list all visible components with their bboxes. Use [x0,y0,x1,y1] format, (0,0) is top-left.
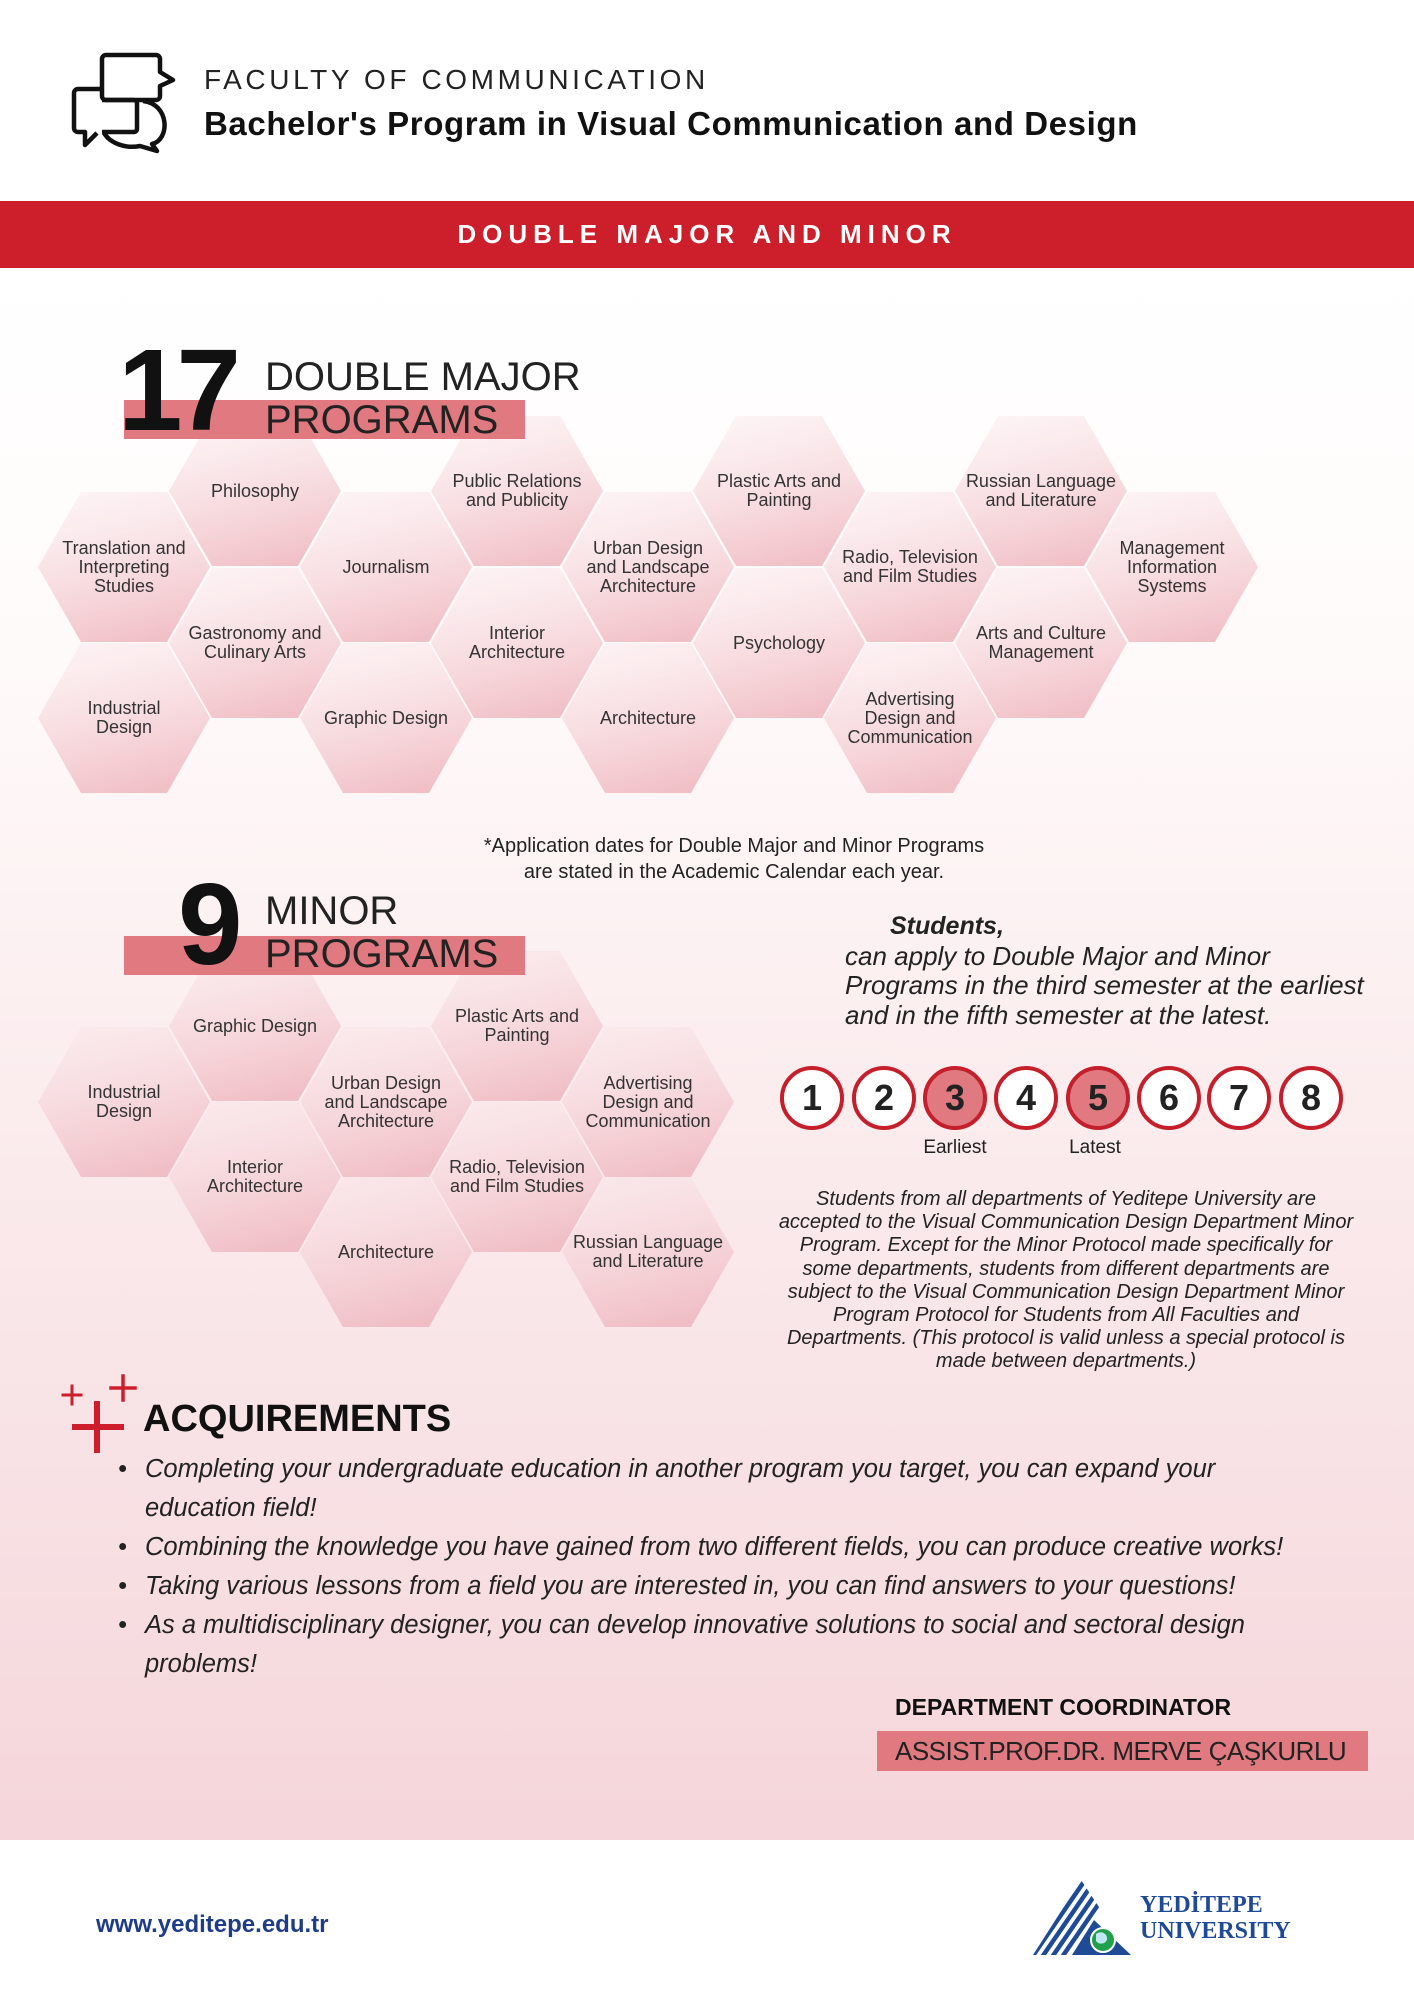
hex: Radio TV: and Film Studies [843,566,977,586]
text: education field! [145,1494,317,1522]
heading: acquirements: ACQUIREMENTS [143,1398,451,1440]
header: faculty: FACULTY OF COMMUNICATION [204,64,709,95]
hex: Psychology [693,568,865,718]
minor hex: Advertising [562,1027,734,1177]
semester circles: 7 [1229,1077,1249,1118]
hex: Industrial Design: Design [96,717,152,737]
hex: Gastronomy: Gastronomy and [188,623,322,643]
minor hex: Industrial Design: Design [96,1101,152,1121]
semester circles: Earliest [923,1137,987,1158]
hex: Plastic Arts: Painting [746,490,812,510]
minor hex: Industrial Design: Industrial [87,1082,161,1102]
text: • [118,1572,127,1600]
text: minor protocol paragraph: Program. Except for the Minor Protocol made specifically for [800,1234,1332,1256]
hex: Industrial Design [38,643,210,793]
heading: 9 minor: 9 [178,859,243,989]
text: students can apply: Programs in the third semester at the earliest [845,970,1364,1000]
hex: Advertising: Communication [847,727,973,747]
minor hex: Advertising: Communication [585,1111,711,1131]
minor hex: Russian [562,1177,734,1327]
hex: Plastic Arts: Plastic Arts and [717,471,841,491]
minor hex: Plastic Arts: Plastic Arts and [455,1006,579,1026]
text: As a multidisciplinary designer, you can develop innovative solutions to social and sectoral design [145,1611,1245,1639]
text: minor protocol paragraph: Departments. (This protocol is valid unless a special protocol is [787,1327,1345,1349]
heading: 9 minor: PROGRAMS [265,932,498,976]
semester circles: 5 [1088,1077,1108,1118]
hex: Graphic Design: Graphic Design [324,708,448,728]
minor hex: Urban: and Landscape [324,1092,448,1112]
hex: Public Relations [431,416,603,566]
text: Completing your undergraduate education in another program you target, you can expand your [145,1455,1215,1483]
hex: Russian [955,416,1127,566]
hex: Plastic Arts [693,416,865,566]
text: students can apply: can apply to Double Major and Minor [845,940,1270,970]
logo: yeditepe [1033,1881,1291,1955]
coordinator title: DEPARTMENT COORDINATOR [895,1694,1231,1720]
minor hex: Architecture [300,1177,472,1327]
hex: Interior Architecture: Architecture [469,642,565,662]
footer url: www.yeditepe.edu.tr [96,1911,328,1938]
coordinator name [877,1731,1368,1771]
hex: Arts and Culture [955,568,1127,718]
hex: Industrial Design: Industrial [87,698,161,718]
hex: Gastronomy: Culinary Arts [204,642,306,662]
hex: Public Relations: Public Relations [452,471,582,491]
semester circles: Latest [1069,1137,1121,1158]
semester circles: 1 [802,1077,822,1118]
hex: Translation: Interpreting [78,557,170,577]
minor hex: Radio TV [431,1102,603,1252]
hex: Advertising: Design and [864,708,956,728]
hex: Graphic Design [300,643,472,793]
note: application dates: are stated in the Academic Calendar each year. [524,861,944,883]
hex: Psychology: Psychology [733,633,825,653]
hex: Translation: Studies [94,576,154,596]
text: students can apply [845,912,1365,1030]
text: Combining the knowledge you have gained from two different fields, you can produce creative works! [145,1533,1283,1561]
hex: Philosophy: Philosophy [211,481,299,501]
semester circles: 8 [1301,1077,1321,1118]
coordinator name: ASSIST.PROF.DR. MERVE ÇAŞKURLU [895,1736,1346,1766]
minor hex: Urban: Architecture [338,1111,434,1131]
text: students can apply: Students, [890,912,1004,940]
minor hex: Radio TV: Radio, Television [449,1157,585,1177]
hex: Advertising: Advertising [865,689,955,709]
hex: Translation: Translation and [62,538,186,558]
hex: MIS: Management [1119,538,1225,558]
minor hex: Interior: Interior [227,1157,283,1177]
hex: Urban Design [562,492,734,642]
hex: Urban Design: Architecture [600,576,696,596]
note: application dates [484,835,984,883]
banner [0,201,1414,268]
minor hex: Urban: Urban Design [331,1073,441,1093]
text: problems! [145,1650,257,1678]
hex: Radio TV: Radio, Television [842,547,978,567]
hex: Public Relations: and Publicity [466,490,568,510]
hex: Arts and Culture: Arts and Culture [976,623,1106,643]
hex: Translation [38,492,210,642]
semester circles [780,1066,1343,1158]
hex: Journalism [300,492,472,642]
heading: 17 double major: 17 [118,325,235,455]
header: program title: Bachelor's Program in Visual Communication and Design [204,105,1138,142]
minor hex: Graphic Design: Graphic Design [193,1016,317,1036]
minor hex: Industrial Design [38,1027,210,1177]
text: minor protocol paragraph: accepted to the Visual Communication Design Department Minor [779,1211,1353,1233]
minor hex: Plastic Arts: Painting [484,1025,550,1045]
bullet list [118,1455,1283,1678]
hex: Advertising [824,643,996,793]
semester circles: 3 [945,1077,965,1118]
hex: Architecture [562,643,734,793]
hex: Journalism: Journalism [342,557,430,577]
semester circles: 4 [1016,1077,1036,1118]
hex: Russian: and Literature [985,490,1097,510]
text: minor protocol paragraph: some departments, students from different departments are [803,1258,1329,1280]
minor hex: Interior: Architecture [207,1176,303,1196]
banner: DOUBLE MAJOR AND MINOR [457,219,957,249]
hex: Interior Architecture [431,568,603,718]
text: minor protocol paragraph: Students from all departments of Yeditepe University are [816,1188,1316,1210]
hex: MIS: Information [1127,557,1217,577]
minor hex: Architecture: Architecture [338,1242,434,1262]
text: • [118,1455,127,1483]
text: • [118,1611,127,1639]
text: minor protocol paragraph: made between departments.) [936,1350,1196,1372]
semester circles: 6 [1159,1077,1179,1118]
heading: 17 double major: PROGRAMS [265,398,498,442]
hex: Gastronomy [169,568,341,718]
hex: Urban Design: Urban Design [593,538,703,558]
heading: 17 double major [118,325,581,455]
text: students can apply: and in the fifth semester at the latest. [845,1000,1271,1030]
hex: Interior Architecture: Interior [489,623,545,643]
hex: Radio TV [824,492,996,642]
note: application dates: *Application dates for Double Major and Minor Programs [484,835,984,857]
minor hex: Graphic Design [169,951,341,1101]
text: minor protocol paragraph: Program Protocol for Students from All Faculties and [833,1304,1299,1326]
minor hex: Plastic Arts [431,951,603,1101]
hex: Philosophy [169,416,341,566]
minor hex: Advertising: Advertising [603,1073,693,1093]
hex: Arts and Culture: Management [988,642,1094,662]
logo: yeditepe: UNIVERSITY [1140,1918,1291,1944]
semester circles: 2 [874,1077,894,1118]
text: • [118,1533,127,1561]
hex: Urban Design: and Landscape [586,557,710,577]
text: minor protocol paragraph [779,1188,1354,1372]
hex: MIS: Systems [1137,576,1207,596]
hex: Russian: Russian Language [966,471,1116,491]
minor hex: Radio TV: and Film Studies [450,1176,584,1196]
minor hex: Interior [169,1102,341,1252]
text: Taking various lessons from a field you are interested in, you can find answers to your questions! [145,1572,1235,1600]
heading: 17 double major: DOUBLE MAJOR [265,355,581,399]
minor hex: Russian: Russian Language [573,1232,723,1252]
heading: 9 minor: MINOR [265,889,398,933]
logo: yeditepe: YEDİTEPE [1140,1892,1263,1918]
hex: MIS [1086,492,1258,642]
text: minor protocol paragraph: subject to the Visual Communication Design Department Minor [788,1281,1344,1303]
heading: 9 minor [124,859,525,989]
hex: Architecture: Architecture [600,708,696,728]
minor hex: Advertising: Design and [602,1092,694,1112]
minor hex: Urban [300,1027,472,1177]
icon: plus signs [62,1374,137,1453]
minor hex: Russian: and Literature [592,1251,704,1271]
icon: speech bubbles [72,52,176,154]
